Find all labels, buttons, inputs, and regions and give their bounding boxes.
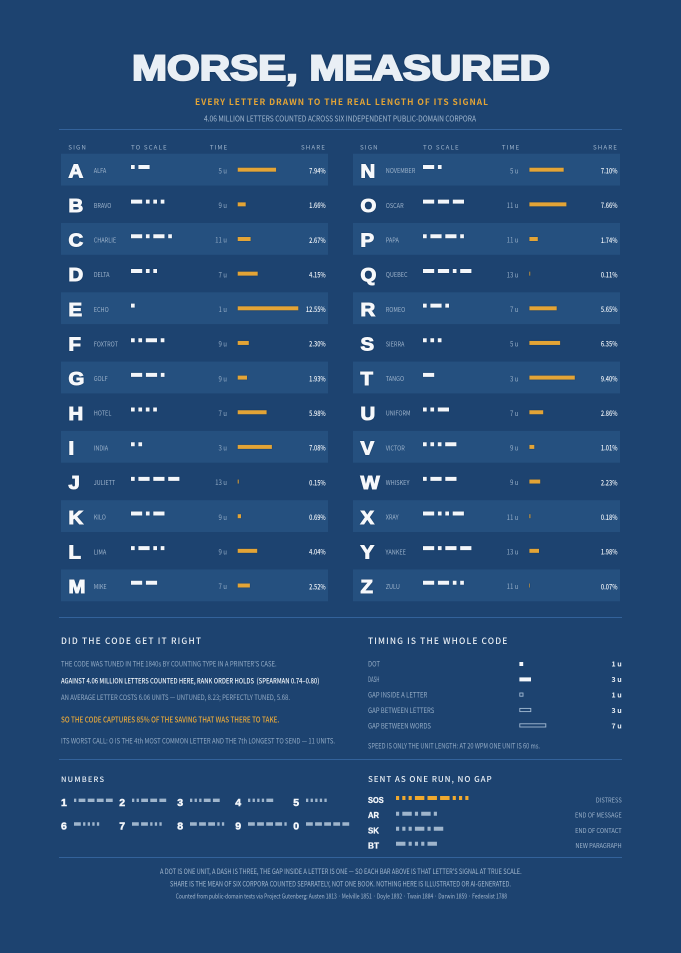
row H: 7 u (219, 407, 227, 418)
row N: 5 u (510, 165, 519, 176)
row I (61, 431, 328, 463)
panel: numbers (61, 774, 349, 832)
panel: did the code get it right (61, 635, 335, 746)
table headers: SIGN (360, 143, 379, 152)
row M: 2.52% (309, 580, 326, 592)
timing row: gap between words (368, 720, 622, 731)
corpus note: 4.06 MILLION LETTERS COUNTED ACROSS SIX INDEPENDENT PUBLIC-DOMAIN CORPORA (204, 112, 476, 124)
row I: 3 u (219, 442, 227, 453)
row D: D (69, 265, 83, 286)
row G: 9 u (219, 373, 227, 383)
table headers: SHARE (301, 143, 326, 152)
row S: SIERRA (386, 339, 405, 349)
digit 6 (61, 820, 99, 832)
row X: 11 u (507, 511, 519, 522)
heading: TIMING IS THE WHOLE CODE (368, 635, 507, 647)
row E: E (69, 300, 82, 321)
row X: XRAY (386, 512, 399, 522)
row T: 9.40% (601, 372, 618, 384)
row J: JULIETT (94, 477, 116, 487)
digit 4 (235, 797, 273, 809)
digit 1 (61, 797, 113, 809)
row W (360, 473, 618, 494)
row S: 5 u (510, 338, 519, 349)
row L (68, 542, 326, 563)
footer notes (160, 866, 522, 900)
table headers: TO SCALE (423, 143, 460, 152)
row H (68, 404, 326, 425)
prosign SOS: DISTRESS (596, 795, 622, 805)
row I: I (69, 438, 74, 459)
row B: 1.66% (309, 199, 326, 210)
row M: MIKE (94, 581, 107, 591)
row A: ALFA (94, 166, 107, 175)
row T: 3 u (510, 373, 519, 383)
row F: FOXTROT (94, 339, 118, 349)
row E (61, 292, 328, 324)
prosign AR: END OF MESSAGE (575, 810, 622, 820)
timing row: gap between words: 7 u (612, 721, 622, 731)
row G: G (69, 369, 84, 390)
text block: sources: Counted from public-domain texts via Project Gutenberg: Austen 1813 · Melville 1851 · Doyle 1892 · Twain 1884 · Darwin 1859 · Federalist 1788 (176, 891, 507, 900)
row U: 2.86% (601, 407, 618, 418)
heading: SENT AS ONE RUN, NO GAP (368, 774, 492, 785)
row T: T (361, 369, 373, 390)
digit 5 (293, 797, 327, 809)
row J (68, 473, 326, 494)
row A: 5 u (219, 165, 227, 176)
row W: 2.23% (601, 476, 618, 488)
row O: 11 u (507, 199, 519, 210)
row M: M (69, 577, 85, 598)
text block: scale note: A DOT IS ONE UNIT, A DASH IS THREE, THE GAP INSIDE A LETTER IS ONE — SO EACH BAR ABOVE IS THAT LETTER'S SIGNAL AT TRUE SCALE. (160, 866, 522, 877)
row Q (360, 265, 618, 286)
row L: LIMA (94, 547, 106, 557)
row D: DELTA (94, 269, 110, 279)
timing row: dash: DASH (368, 674, 380, 685)
panel: timing is the whole code (368, 635, 622, 751)
row H: 5.98% (309, 407, 326, 418)
row C: 2.67% (309, 234, 326, 245)
row G: 1.93% (309, 372, 326, 384)
row A (61, 154, 328, 186)
row Q: QUEBEC (386, 269, 408, 279)
row R: 5.65% (601, 303, 618, 314)
row D (68, 265, 326, 286)
timing row: gap inside a letter (368, 690, 622, 701)
heading: DID THE CODE GET IT RIGHT (61, 635, 201, 647)
row P: PAPA (386, 235, 399, 245)
row P: 1.74% (601, 234, 618, 245)
row U: U (361, 404, 375, 425)
prosign BT (368, 840, 622, 850)
title: MORSE, MEASURED (132, 49, 550, 88)
row B: BRAVO (94, 200, 112, 210)
row O: 7.66% (601, 199, 618, 210)
row K: 9 u (219, 511, 227, 522)
row F: 9 u (219, 338, 227, 349)
row N: NOVEMBER (386, 166, 415, 175)
row X: 0.18% (601, 511, 618, 522)
table headers: TO SCALE (131, 143, 168, 152)
timing row: dash (368, 674, 622, 685)
timing row: gap between letters: 3 u (612, 706, 622, 716)
digit 8: 8 (177, 820, 183, 832)
text block: share note: SHARE IS THE MEAN OF SIX CORPORA COUNTED SEPARATELY, NOT ONE BOOK. NOTHING HERE IS ILLUSTRATED OR AI-GENERATED. (170, 879, 511, 890)
row I: 7.08% (309, 442, 326, 453)
digit 6: 6 (61, 820, 67, 832)
prosign SK (368, 825, 622, 835)
timing row: dot: 1 u (612, 660, 622, 670)
prosign BT: BT (368, 840, 379, 850)
row J: 13 u (215, 477, 227, 487)
digit 9 (235, 820, 287, 832)
row K: 0.69% (309, 511, 326, 522)
row Q: 13 u (507, 269, 519, 280)
row E: 12.55% (306, 303, 326, 314)
prosign SK: SK (368, 825, 379, 835)
digit 0: 0 (293, 820, 299, 832)
row V (353, 431, 620, 463)
row H: H (69, 404, 83, 425)
row Q: 0.11% (601, 268, 618, 280)
row K: K (69, 508, 83, 529)
row R: 7 u (510, 303, 519, 314)
row V: V (361, 438, 374, 459)
prosign AR (368, 810, 622, 820)
row U: 7 u (510, 407, 519, 418)
timing row: dot: DOT (368, 659, 380, 670)
timing row: dash: 3 u (612, 675, 622, 685)
row X (353, 500, 620, 532)
digit 7: 7 (119, 820, 125, 832)
row M: 7 u (219, 581, 227, 591)
row J: 0.15% (309, 476, 326, 488)
timing row: gap between words: GAP BETWEEN WORDS (368, 720, 431, 731)
table headers: SIGN (68, 143, 87, 152)
table headers: TIME (210, 143, 228, 152)
row E: 1 u (219, 303, 227, 314)
digit 2 (119, 797, 166, 809)
row C: C (69, 230, 83, 251)
row R: ROMEO (386, 304, 406, 314)
callout: saving: SO THE CODE CAPTURES 85% OF THE SAVING THAT WAS THERE TO TAKE. (61, 715, 279, 726)
row Y: YANKEE (385, 547, 406, 557)
row C: CHARLIE (94, 235, 116, 245)
row N: N (361, 161, 375, 182)
row Y: Y (361, 542, 374, 563)
row Y: 1.98% (601, 546, 618, 557)
row A: 7.94% (309, 164, 326, 176)
row F (68, 334, 326, 355)
prosign BT: NEW PARAGRAPH (575, 840, 622, 850)
heading: NUMBERS (61, 774, 104, 785)
digit 7 (119, 820, 162, 832)
row Y (360, 542, 618, 563)
table headers: TIME (502, 143, 520, 152)
row R: R (361, 300, 375, 321)
row U (360, 404, 618, 425)
digit 3 (177, 797, 220, 809)
row C: 11 u (215, 234, 227, 245)
row T: TANGO (386, 373, 405, 383)
row G (61, 362, 328, 393)
digit 0 (293, 820, 349, 832)
row R (353, 292, 620, 324)
digit 3: 3 (177, 797, 183, 809)
row P: P (361, 230, 374, 251)
text block: rank order: AGAINST 4.06 MILLION LETTERS COUNTED HERE, RANK ORDER HOLDS (SPEARMAN 0.74–0.80) (61, 675, 319, 686)
row B (68, 196, 326, 217)
row C (61, 223, 328, 255)
row W: WHISKEY (386, 477, 410, 487)
row G: GOLF (94, 373, 108, 383)
row P: 11 u (507, 234, 519, 245)
row F: 2.30% (309, 338, 326, 349)
row U: UNIFORM (386, 408, 411, 418)
row S: 6.35% (601, 338, 618, 349)
row A: A (69, 161, 83, 182)
prosign AR: AR (368, 810, 379, 820)
timing row: gap inside a letter: GAP INSIDE A LETTER (368, 690, 428, 701)
digit 2: 2 (119, 797, 125, 809)
row Z (353, 570, 620, 601)
text block: average cost: AN AVERAGE LETTER COSTS 6.06 UNITS — UNTUNED, 8.23; PERFECTLY TUNED, 5.68. (61, 692, 290, 703)
row B: B (69, 196, 83, 217)
row B: 9 u (219, 199, 227, 210)
panel: left letter table A to M (61, 154, 328, 601)
row D: 4.15% (309, 268, 326, 280)
row N (353, 154, 620, 186)
row O: OSCAR (386, 200, 404, 210)
row O: O (361, 196, 376, 217)
row H: HOTEL (94, 408, 112, 418)
digit 8 (177, 820, 224, 832)
row E: ECHO (94, 304, 109, 314)
row Q: Q (361, 265, 376, 286)
text block: worst call: ITS WORST CALL: O IS THE 4th MOST COMMON LETTER AND THE 7th LONGEST TO SEND — 11 UNITS. (61, 735, 335, 746)
row W: W (361, 473, 380, 494)
row X: X (361, 508, 374, 529)
timing row: gap between letters: GAP BETWEEN LETTERS (368, 705, 435, 716)
table headers (68, 143, 618, 152)
row F: F (69, 334, 81, 355)
row V: 9 u (510, 442, 519, 453)
row I: INDIA (94, 443, 108, 453)
digit 1: 1 (61, 797, 67, 809)
text block: speed note: SPEED IS ONLY THE UNIT LENGTH: AT 20 WPM ONE UNIT IS 60 ms. (368, 740, 540, 751)
row T (353, 362, 620, 393)
timing row: gap inside a letter: 1 u (612, 691, 622, 701)
prosign SOS: SOS (368, 795, 384, 805)
row V: 1.01% (601, 442, 618, 453)
row N: 7.10% (601, 164, 618, 176)
row P (353, 223, 620, 255)
row S: S (361, 334, 374, 355)
row D: 7 u (219, 269, 227, 280)
panel: sent as one run (368, 774, 622, 850)
row K: KILO (94, 512, 106, 522)
digit 4: 4 (235, 797, 241, 809)
digit 5: 5 (293, 797, 299, 809)
row S (360, 334, 618, 355)
text block: history: THE CODE WAS TUNED IN THE 1840s BY COUNTING TYPE IN A PRINTER'S CASE. (61, 659, 277, 670)
row J: J (69, 473, 80, 494)
panel: right letter table N to Z (353, 154, 620, 601)
row Z: 0.07% (601, 580, 618, 592)
table headers: SHARE (593, 143, 618, 152)
row Z: ZULU (386, 581, 400, 591)
row Z: Z (361, 577, 373, 598)
row Z: 11 u (507, 581, 519, 591)
timing row: dot (368, 659, 622, 670)
row M (61, 570, 328, 601)
timing row: gap between letters (368, 705, 622, 716)
row W: 9 u (510, 477, 519, 487)
row K (61, 500, 328, 532)
row L: 4.04% (309, 546, 326, 557)
subtitle: EVERY LETTER DRAWN TO THE REAL LENGTH OF ITS SIGNAL (195, 96, 488, 108)
digit 9: 9 (235, 820, 241, 832)
prosign SK: END OF CONTACT (575, 825, 622, 835)
row Y: 13 u (507, 546, 519, 557)
row L: 9 u (219, 546, 227, 557)
row V: VICTOR (386, 443, 405, 453)
row L: L (69, 542, 81, 563)
row O (360, 196, 618, 217)
prosign SOS (368, 795, 622, 805)
